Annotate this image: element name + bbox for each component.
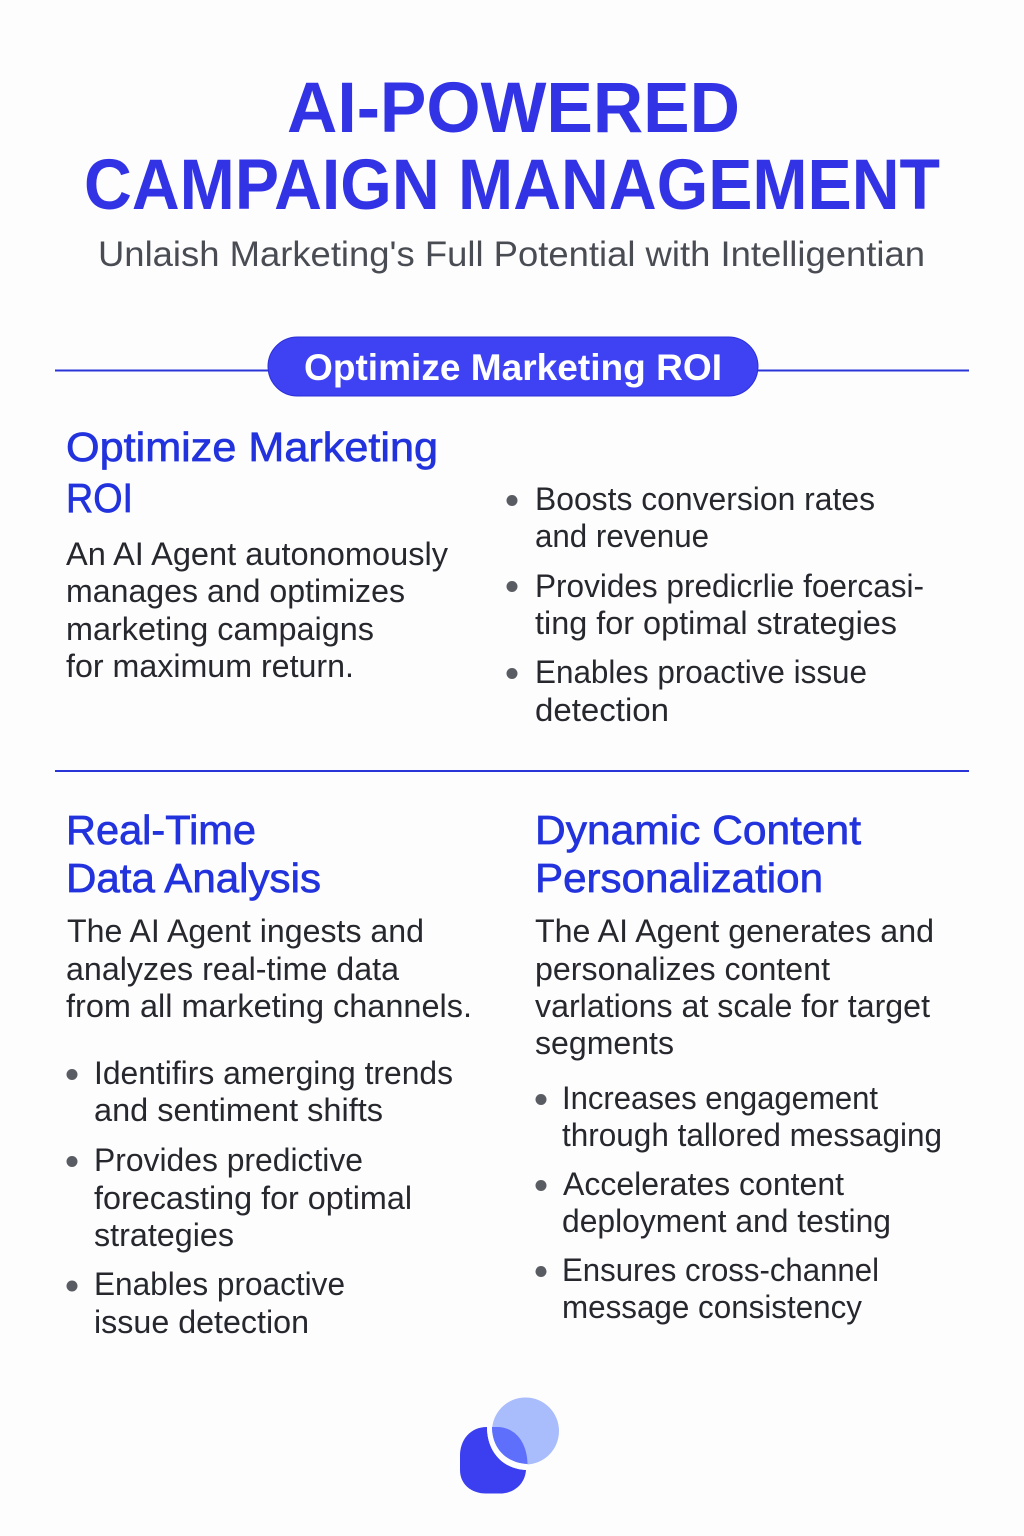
- heading: dynamic content personalization: Dynamic Content: [535, 807, 862, 853]
- bullet list: data analysis benefits: strategies: [94, 1217, 234, 1253]
- title: CAMPAIGN MANAGEMENT: [84, 146, 940, 225]
- bullet list: personalization benefits: Ensures cross-channel: [562, 1252, 879, 1288]
- bullet list: data analysis benefits: Enables proactive: [94, 1266, 345, 1302]
- heading: real-time data analysis: Data Analysis: [66, 855, 321, 901]
- title: [84, 69, 940, 225]
- text block: personalization description: segments: [535, 1025, 674, 1061]
- text block: personalization description: The AI Agent generates and: [535, 913, 934, 949]
- bullet list: personalization benefits: Increases engagement: [562, 1080, 878, 1116]
- bullet list: roi benefits: Boosts conversion rates: [535, 481, 875, 517]
- title: AI-POWERED: [287, 69, 740, 148]
- panel: dynamic content personalization: [535, 807, 942, 1325]
- section banner: [55, 337, 969, 396]
- heading: optimize marketing roi: ROI: [66, 475, 133, 521]
- bullet list: roi benefits: ting for optimal strategies: [535, 605, 897, 641]
- heading: optimize marketing roi: Optimize Marketing: [66, 424, 438, 470]
- panel: optimize marketing roi: [55, 424, 969, 772]
- heading: optimize marketing roi: [66, 424, 438, 521]
- bullet list: data analysis benefits: Provides predictive: [94, 1142, 363, 1178]
- bullet list: roi benefits: detection: [535, 692, 669, 728]
- subtitle: Unlaish Marketing's Full Potential with Intelligentian: [98, 235, 925, 274]
- heading: real-time data analysis: Real-Time: [66, 807, 256, 853]
- text block: data analysis description: from all marketing channels.: [66, 988, 472, 1024]
- text block: data analysis description: [66, 913, 472, 1024]
- heading: real-time data analysis: [66, 807, 321, 901]
- bullet list: data analysis benefits: issue detection: [94, 1304, 309, 1340]
- text block: roi description: for maximum return.: [66, 648, 354, 684]
- bullet list: roi benefits: Enables proactive issue: [535, 654, 867, 690]
- text block: data analysis description: analyzes real-time data: [66, 951, 399, 987]
- text block: roi description: An AI Agent autonomously: [66, 536, 448, 572]
- bullet list: roi benefits: and revenue: [535, 518, 709, 554]
- text block: roi description: [66, 536, 448, 684]
- text block: personalization description: varlations at scale for target: [535, 988, 930, 1024]
- text block: data analysis description: The AI Agent ingests and: [67, 913, 424, 949]
- section banner: Optimize Marketing ROI: [304, 347, 722, 388]
- bullet list: data analysis benefits: Identifirs amerging trends: [94, 1055, 453, 1091]
- text block: personalization description: [535, 913, 934, 1061]
- heading: dynamic content personalization: Personalization: [535, 855, 823, 901]
- bullet list: personalization benefits: Accelerates content: [563, 1166, 844, 1202]
- bullet list: personalization benefits: message consistency: [562, 1289, 862, 1325]
- bullet list: roi benefits: Provides predicrlie foercasi-: [535, 568, 924, 604]
- text block: roi description: marketing campaigns: [66, 611, 374, 647]
- text block: personalization description: personalizes content: [535, 951, 830, 987]
- bullet list: data analysis benefits: forecasting for optimal: [94, 1180, 412, 1216]
- bullet list: data analysis benefits: and sentiment shifts: [94, 1092, 383, 1128]
- bullet list: personalization benefits: [536, 1080, 942, 1325]
- bullet list: roi benefits: [506, 481, 924, 728]
- heading: dynamic content personalization: [535, 807, 862, 901]
- bullet list: personalization benefits: deployment and testing: [562, 1203, 891, 1239]
- bullet list: personalization benefits: through tallored messaging: [562, 1117, 942, 1153]
- icon: overlapping shapes logo: [460, 1398, 559, 1494]
- panel: real-time data analysis: [66, 807, 472, 1340]
- text block: roi description: manages and optimizes: [66, 573, 405, 609]
- bullet list: data analysis benefits: [66, 1055, 453, 1340]
